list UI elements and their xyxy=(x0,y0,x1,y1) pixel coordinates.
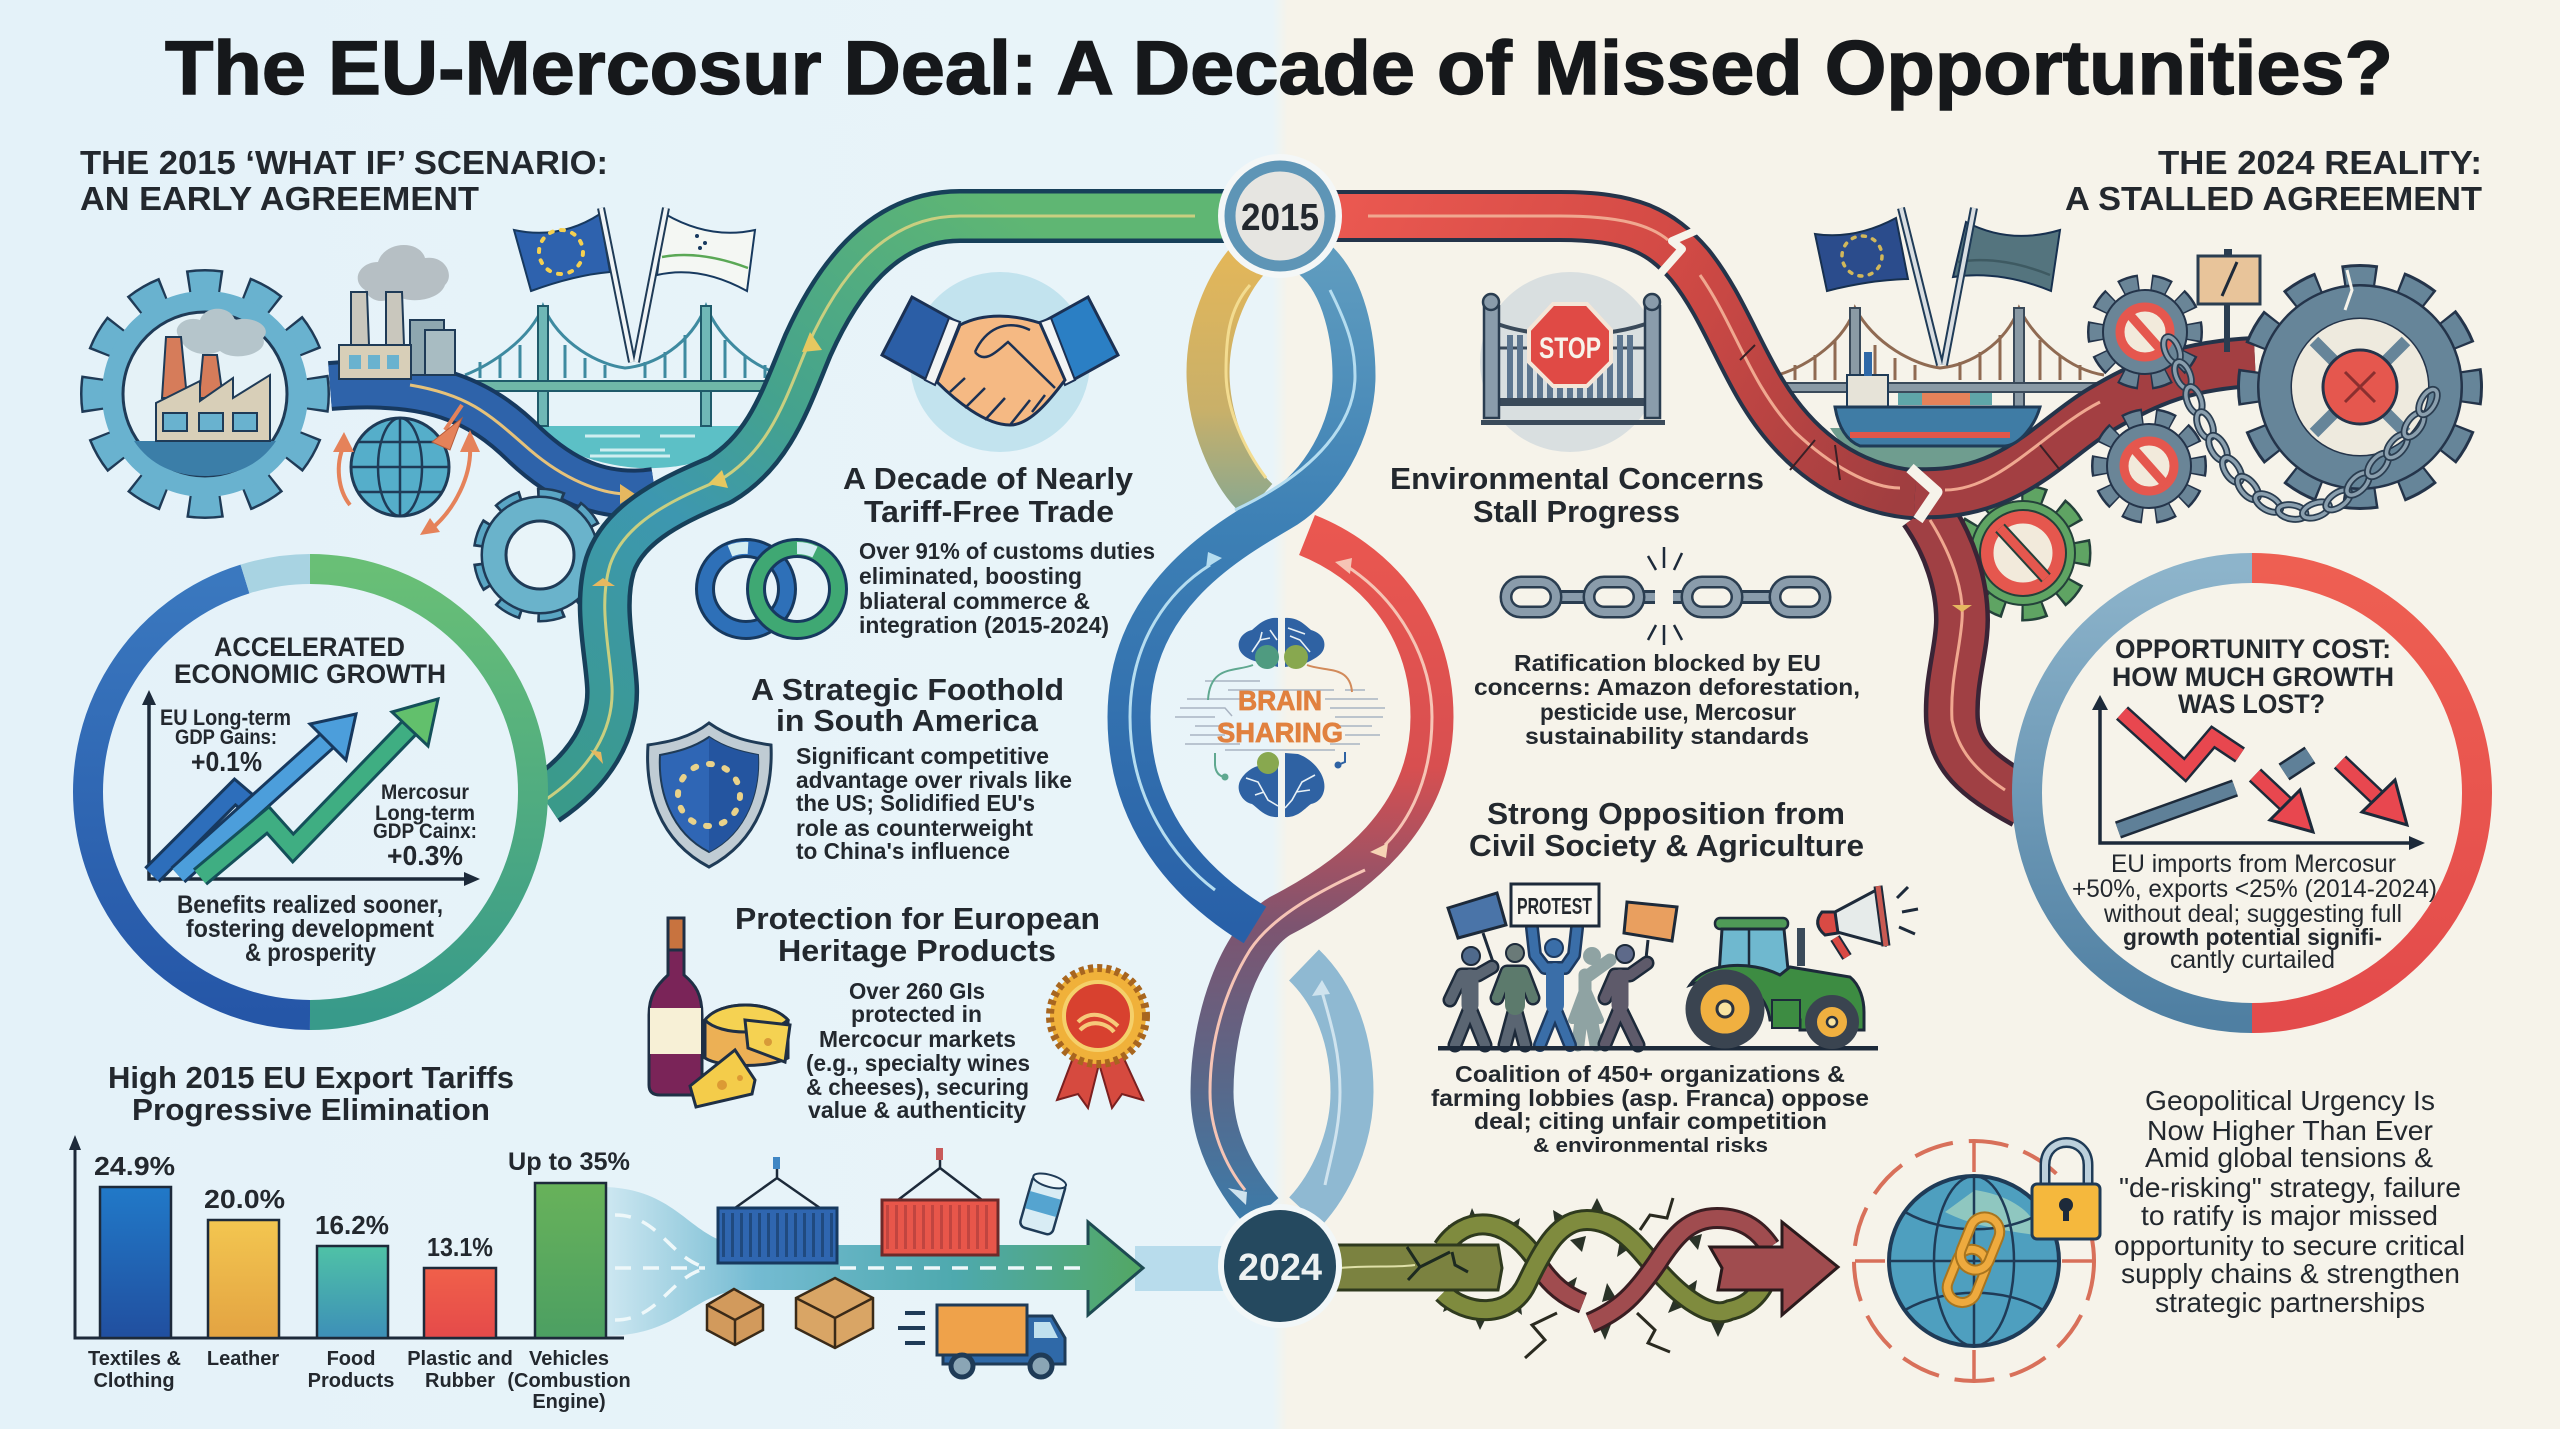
strands xyxy=(1443,1224,1535,1258)
bar: food: Food xyxy=(327,1348,375,1370)
heading: tariffs chart: Progressive Elimination xyxy=(132,1092,490,1127)
bar: textiles: Textiles & xyxy=(88,1348,181,1370)
label: EU GDP gains: +0.1% xyxy=(191,746,262,777)
heading: OPPORTUNITY COST: xyxy=(2115,634,2391,664)
text: protection for heritage products: & cheeses), securing xyxy=(806,1074,1029,1100)
panel: opportunity cost: HOW MUCH GROWTH xyxy=(2112,662,2394,692)
text: a decade of nearly tariff-free trade: bliateral commerce & xyxy=(859,588,1090,614)
falling chart xyxy=(2092,695,2425,850)
icon: delivery truck xyxy=(898,1305,1065,1377)
text: coalition: Coalition of 450+ organizations & xyxy=(1455,1061,1845,1087)
panel: accelerated economic growth: ECONOMIC GROWTH xyxy=(174,659,446,689)
bar: leather: 20.0% xyxy=(204,1184,285,1214)
icon: cardboard boxes xyxy=(707,1278,873,1348)
text: protection for heritage products: value & authenticity xyxy=(808,1097,1026,1123)
text: geopolitical urgency xyxy=(2114,1085,2465,1318)
heading: 2015 what if scenario: AN EARLY AGREEMENT xyxy=(80,180,479,217)
text: geopolitical urgency: Geopolitical Urgency Is xyxy=(2145,1085,2435,1116)
flow arrow to 2024 xyxy=(606,1187,1230,1336)
smoke xyxy=(177,309,266,356)
caption: EU imports from Mercosur xyxy=(2111,850,2396,878)
brain sharing emblem xyxy=(1175,618,1385,817)
text: a decade of nearly tariff-free trade: Tariff-Free Trade xyxy=(864,494,1114,529)
text: ratification blocked: pesticide use, Mercosur xyxy=(1540,699,1796,725)
flags EU and Mercosur xyxy=(514,208,755,362)
text: ratification blocked: Ratification blocked by EU xyxy=(1514,650,1821,676)
icon: blue container xyxy=(718,1157,837,1263)
icon: stop gate xyxy=(1480,272,1665,452)
signs xyxy=(1448,893,1506,938)
text: a decade of nearly tariff-free trade: Over 91% of customs duties xyxy=(859,538,1155,564)
red road from 2015 xyxy=(1335,216,2255,802)
bar: vehicles: (Combustion xyxy=(507,1370,631,1392)
bridge and water xyxy=(1778,308,2104,480)
person 5 xyxy=(1605,963,1647,1045)
text: protection for heritage products: protected in xyxy=(851,1001,982,1027)
icon: handshake xyxy=(882,272,1118,452)
text: protection for heritage products: (e.g., specialty wines xyxy=(806,1050,1030,1076)
text: coalition: & environmental risks xyxy=(1533,1135,1768,1157)
icon: broken chain xyxy=(1506,547,1825,645)
text: strategic foothold: A Strategic Foothold xyxy=(751,672,1064,707)
text: strategic foothold xyxy=(751,672,1072,864)
label: EU GDP gains xyxy=(160,705,291,777)
green road from 2015 xyxy=(545,216,1225,800)
text: geopolitical urgency: "de-risking" strategy, failure xyxy=(2119,1172,2461,1203)
brain sharing emblem: SHARING xyxy=(1217,717,1343,748)
blue road from factory xyxy=(330,384,655,504)
icon: megaphone xyxy=(1818,886,1918,957)
ground line xyxy=(1438,1046,1878,1050)
text: geopolitical urgency: supply chains & strengthen xyxy=(2121,1258,2460,1289)
heading: 2015 what if scenario xyxy=(80,144,608,217)
bar: food xyxy=(308,1210,394,1392)
text: ratification blocked xyxy=(1474,650,1860,749)
bar: plastic: Rubber xyxy=(425,1370,495,1392)
person 4 faded xyxy=(1572,960,1610,1045)
text: geopolitical urgency: to ratify is major missed xyxy=(2141,1200,2438,1231)
panel: accelerated economic growth xyxy=(88,569,533,1015)
icon: stop gate: STOP xyxy=(1539,332,1601,365)
icon: interlocked rings xyxy=(705,548,838,630)
road breaks xyxy=(1660,228,1702,274)
icon: wine and cheese xyxy=(649,918,790,1107)
icon: green gear with ban xyxy=(1965,495,2081,611)
cracks xyxy=(1525,1198,1673,1358)
person 1 xyxy=(1450,967,1492,1045)
icon: factory gear xyxy=(93,282,317,506)
icon: can xyxy=(1019,1170,1068,1236)
bar: textiles: 24.9% xyxy=(94,1151,175,1181)
node: 2024: 2024 xyxy=(1238,1247,1322,1289)
icon: small gear xyxy=(484,499,596,611)
circuit lines xyxy=(1175,681,1385,750)
bar: food: Products xyxy=(308,1370,394,1392)
caption: +50%, exports <25% (2014-2024) xyxy=(2072,875,2437,903)
heading: 2024 reality: A STALLED AGREEMENT xyxy=(2065,180,2482,217)
bar: food: 16.2% xyxy=(315,1210,389,1240)
text: geopolitical urgency: Now Higher Than Ever xyxy=(2147,1115,2433,1146)
icon: small gear upper xyxy=(2097,284,2193,380)
bridge xyxy=(1778,308,2104,380)
panel: opportunity cost: WAS LOST? xyxy=(2178,689,2325,719)
arrow head: maroon xyxy=(1710,1222,1838,1315)
text: coalition: farming lobbies (asp. Franca) oppose xyxy=(1431,1085,1869,1111)
text: environmental concerns xyxy=(1390,461,1764,529)
caption: & prosperity xyxy=(245,939,376,967)
factory xyxy=(162,337,223,398)
text: protection for heritage products: Mercocur markets xyxy=(819,1026,1016,1052)
water xyxy=(530,426,760,468)
text: ratification blocked: concerns: Amazon deforestation, xyxy=(1474,674,1860,700)
label: Mercosur GDP gains: GDP Cainx: xyxy=(373,820,477,843)
bar: leather xyxy=(204,1184,285,1370)
caption: cantly curtailed xyxy=(2170,946,2335,974)
icon: small gear lower xyxy=(2101,418,2197,514)
text: coalition xyxy=(1431,1061,1869,1157)
bridge with water xyxy=(465,306,786,468)
stem xyxy=(1335,1245,1502,1290)
icon: large stalled gear xyxy=(2252,270,2468,495)
person 3 xyxy=(1532,928,1577,1045)
icon: EU shield xyxy=(648,723,771,867)
icon: red container xyxy=(882,1148,998,1255)
bar: vehicles: Engine) xyxy=(532,1391,606,1413)
bar: vehicles: Vehicles xyxy=(529,1348,609,1370)
text: environmental concerns: Stall Progress xyxy=(1473,494,1680,529)
label: Mercosur GDP gains xyxy=(373,781,477,871)
text: a decade of nearly tariff-free trade: eliminated, boosting xyxy=(859,563,1082,589)
bar: textiles: Clothing xyxy=(93,1370,175,1392)
caption: fostering development xyxy=(186,915,435,943)
text: strategic foothold: Significant competitive xyxy=(796,743,1049,769)
caption: without deal; suggesting full xyxy=(2103,900,2402,928)
brain sharing label: BRAIN xyxy=(1238,685,1322,716)
central DNA ribbon xyxy=(1129,258,1432,1212)
icon: heavy chain xyxy=(2160,334,2441,521)
text: strategic foothold: to China's influence xyxy=(796,838,1010,864)
person 2 xyxy=(1497,972,1533,1045)
text: strong opposition: Strong Opposition from xyxy=(1487,796,1845,831)
heading: tariffs chart xyxy=(108,1060,514,1127)
thorns xyxy=(1443,1198,1726,1340)
node: 2024 xyxy=(1218,1204,1342,1328)
brain bottom xyxy=(1239,752,1324,817)
text: coalition: deal; citing unfair competition xyxy=(1474,1108,1827,1134)
heading: 2024 reality xyxy=(2065,144,2482,217)
panel: opportunity cost xyxy=(2027,568,2477,1018)
icon: protesters xyxy=(1438,884,1878,1050)
bar chart: tariffs xyxy=(69,1135,631,1413)
bar: plastic xyxy=(407,1232,513,1392)
brain top xyxy=(1239,618,1324,669)
growth chart xyxy=(142,690,480,886)
icon: GI rosette xyxy=(1050,968,1146,1108)
text: strong opposition xyxy=(1469,796,1864,863)
heading: ACCELERATED xyxy=(214,632,405,662)
icon: globe with arrows xyxy=(333,405,480,535)
bar: textiles xyxy=(88,1151,181,1392)
thorny twisted road xyxy=(1335,1198,1770,1358)
ring: blue and green xyxy=(88,569,533,1015)
icon: second factory with smoke xyxy=(339,245,455,379)
label: EU GDP gains: EU Long-term xyxy=(160,705,291,730)
caption: Benefits realized sooner, xyxy=(177,891,443,919)
text: a decade of nearly tariff-free trade: A Decade of Nearly xyxy=(843,461,1134,496)
sign poles xyxy=(1483,933,1648,968)
flags dulled xyxy=(1815,208,2060,365)
bridge structure xyxy=(465,306,786,378)
icon: broken sign xyxy=(2198,249,2260,352)
caption xyxy=(177,891,443,967)
bar: plastic: Plastic and xyxy=(407,1348,513,1370)
caption xyxy=(2072,850,2437,974)
text: strategic foothold: the US; Solidified EU's xyxy=(796,790,1035,816)
text: geopolitical urgency: strategic partnerships xyxy=(2155,1287,2425,1318)
icon: cargo ship xyxy=(1835,352,2040,446)
ribbon arrowheads xyxy=(1206,552,1388,1205)
heading: 2015 what if scenario: THE 2015 ‘WHAT IF’ SCENARIO: xyxy=(80,144,608,181)
text: protection for heritage products xyxy=(735,901,1100,1123)
bar: vehicles: Up to 35% xyxy=(508,1148,630,1176)
text: ratification blocked: sustainability standards xyxy=(1525,723,1809,749)
text: strategic foothold: advantage over rivals like xyxy=(796,767,1072,793)
text: strong opposition: Civil Society & Agriculture xyxy=(1469,828,1864,863)
label: Mercosur GDP gains: Mercosur xyxy=(381,781,469,804)
text: a decade of nearly tariff-free trade: integration (2015-2024) xyxy=(859,612,1109,638)
icon: protesters: PROTEST xyxy=(1517,893,1592,919)
text: protection for heritage products: Heritage Products xyxy=(778,933,1056,968)
node: 2015: 2015 xyxy=(1241,197,1319,239)
text: geopolitical urgency: Amid global tensions & xyxy=(2145,1142,2433,1173)
label: Mercosur GDP gains: +0.3% xyxy=(387,840,463,871)
water xyxy=(1830,428,2045,480)
bar: leather: Leather xyxy=(207,1348,279,1370)
text: protection for heritage products: Protection for European xyxy=(735,901,1100,936)
heading: 2024 reality: THE 2024 REALITY: xyxy=(2158,144,2482,181)
icon: tractor xyxy=(1690,918,1864,1043)
text: strategic foothold: in South America xyxy=(776,703,1039,738)
bar: plastic: 13.1% xyxy=(427,1232,493,1262)
node: 2015 xyxy=(1218,154,1342,278)
label: Mercosur GDP gains: Long-term xyxy=(375,802,475,825)
text: protection for heritage products: Over 260 GIs xyxy=(849,978,985,1004)
caption: growth potential signifi- xyxy=(2123,924,2382,950)
text: strategic foothold: role as counterweight xyxy=(796,815,1033,841)
text: environmental concerns: Environmental Concerns xyxy=(1390,461,1764,496)
heading: tariffs chart: High 2015 EU Export Tariffs xyxy=(108,1060,514,1095)
text: geopolitical urgency: opportunity to secure critical xyxy=(2114,1230,2465,1261)
text: a decade of nearly tariff-free trade xyxy=(843,461,1155,638)
icon: globe with lock and chain xyxy=(1854,1141,2100,1382)
bar: vehicles xyxy=(507,1148,631,1413)
title: The EU-Mercosur Deal: A Decade of Missed Opportunities? xyxy=(165,26,2393,111)
label: EU GDP gains: GDP Gains: xyxy=(175,726,277,749)
ring: grey-blue and red xyxy=(2027,568,2477,1018)
